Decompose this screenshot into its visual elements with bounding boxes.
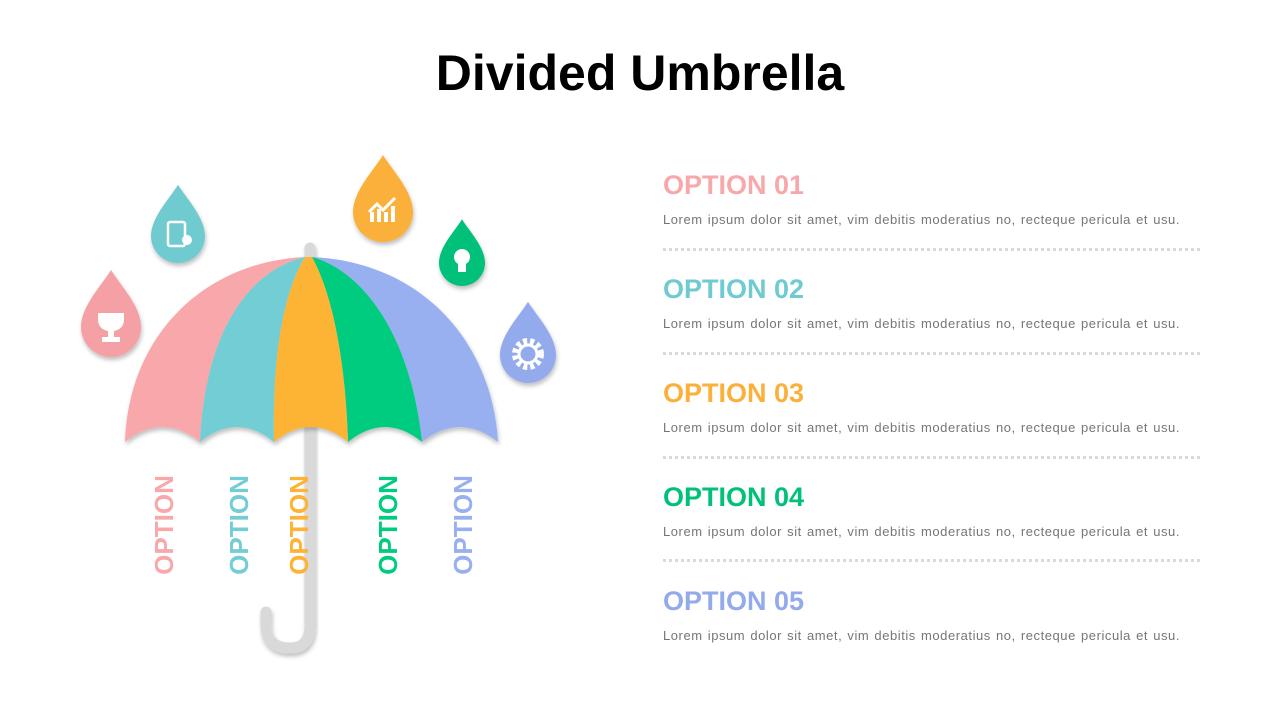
drop: green bulb: [439, 219, 485, 286]
title: Divided Umbrella: [436, 45, 844, 101]
option 02: Lorem ipsum dolor sit amet, vim debitis moderatius no, recteque pericula et usu.: [663, 316, 1180, 331]
option 03: [663, 378, 1180, 435]
option 04: Lorem ipsum dolor sit amet, vim debitis moderatius no, recteque pericula et usu.: [663, 524, 1180, 539]
option 02: [663, 274, 1180, 331]
option 01: OPTION 01: [663, 170, 804, 200]
option 01: [663, 170, 1180, 227]
handle: [266, 248, 310, 648]
option 01: Lorem ipsum dolor sit amet, vim debitis moderatius no, recteque pericula et usu.: [663, 212, 1180, 227]
vertical labels: OPTION: [448, 475, 478, 575]
drop: pink trophy: [81, 270, 141, 357]
option 05: [663, 586, 1180, 643]
drop: yellow chart: [353, 155, 413, 242]
vertical labels: OPTION: [373, 475, 403, 575]
option 05: Lorem ipsum dolor sit amet, vim debitis moderatius no, recteque pericula et usu.: [663, 628, 1180, 643]
vertical labels: [149, 475, 478, 575]
option 03: Lorem ipsum dolor sit amet, vim debitis moderatius no, recteque pericula et usu.: [663, 420, 1180, 435]
option 05: OPTION 05: [663, 586, 804, 616]
option 03: OPTION 03: [663, 378, 804, 408]
option 02: OPTION 02: [663, 274, 804, 304]
drop: blue gear: [500, 302, 556, 383]
option 04: [663, 482, 1180, 539]
canopy: [125, 257, 498, 442]
vertical labels: OPTION: [149, 475, 179, 575]
vertical labels: OPTION: [224, 475, 254, 575]
option 04: OPTION 04: [663, 482, 804, 512]
drop: teal certificate: [151, 185, 205, 263]
vertical labels: OPTION: [284, 475, 314, 575]
umbrella graphic: [80, 155, 560, 659]
